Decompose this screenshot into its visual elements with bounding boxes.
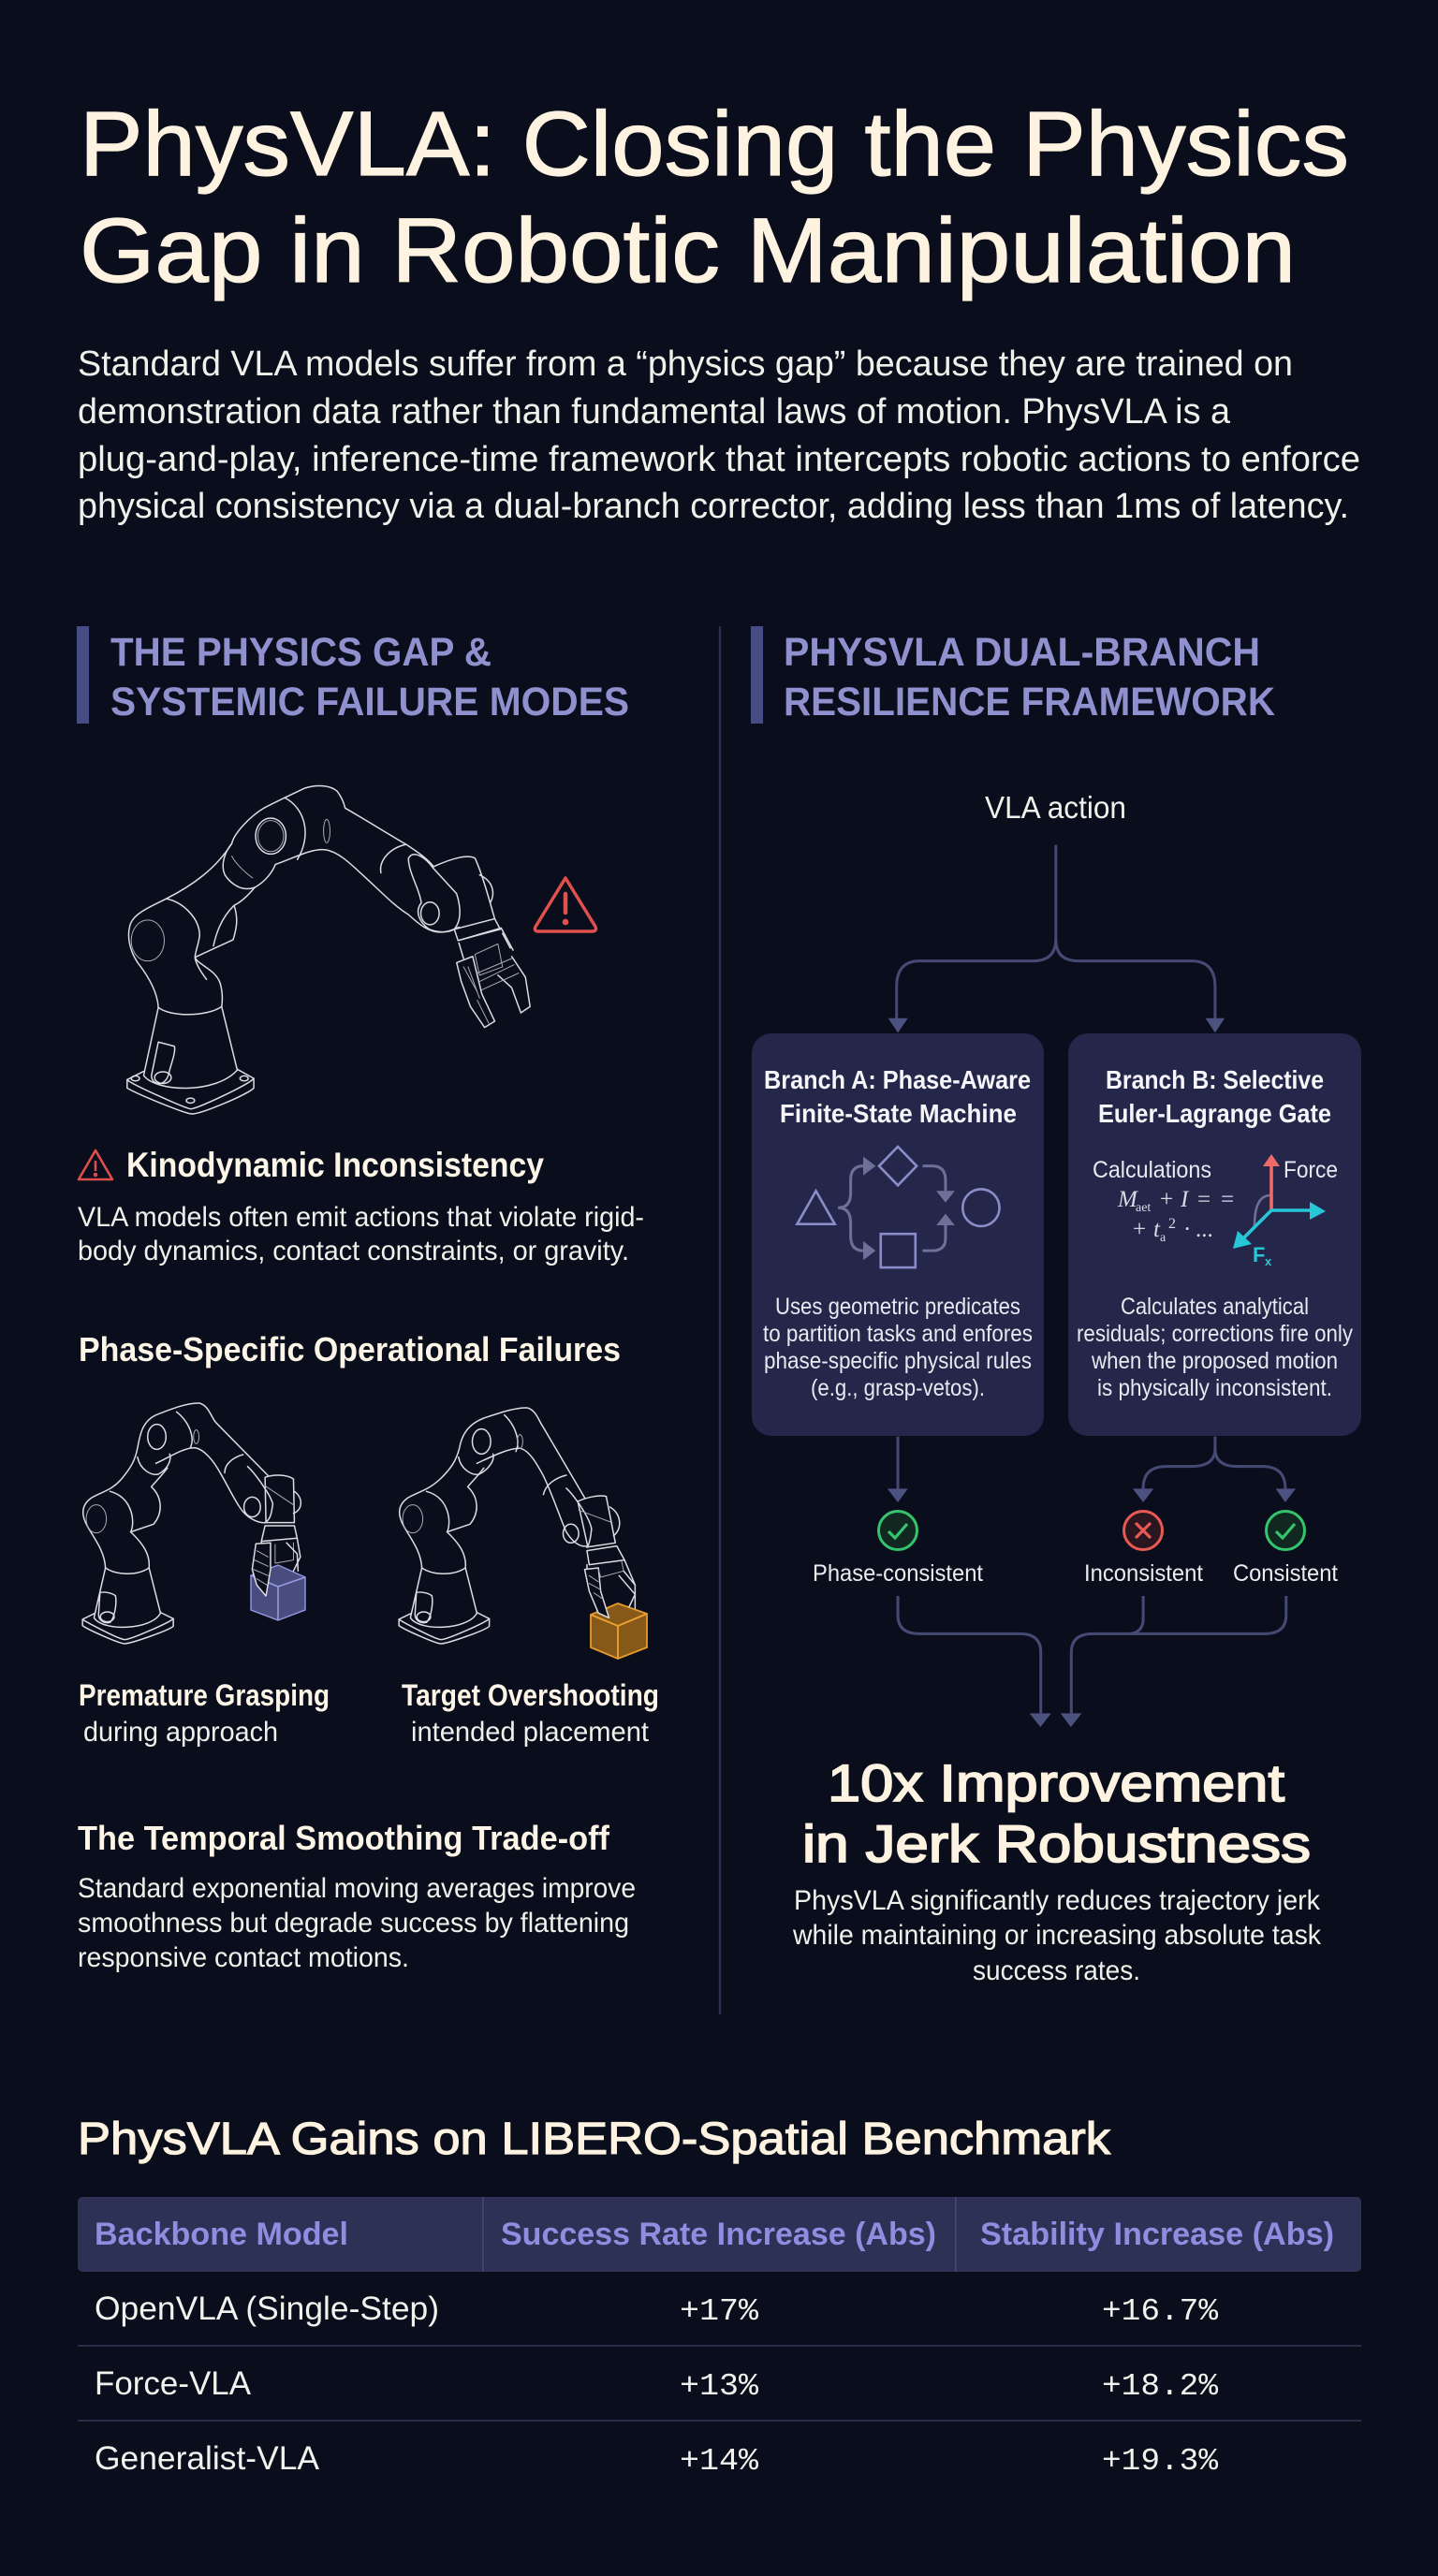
equations: calculations: = — [1221, 1187, 1234, 1212]
row: Force-VLA: +13% — [680, 2369, 758, 2404]
headline result — [802, 1753, 1311, 1873]
caption: target overshooting: intended placement — [411, 1717, 650, 1748]
block: kinodynamic inconsistency — [78, 1146, 644, 1266]
card: branch B: Branch B: Selective — [1106, 1065, 1324, 1094]
equations: calculations: = — [1197, 1187, 1211, 1212]
intro paragraph: plug-and-play, inference-time framework that intercepts robotic actions to enforce — [78, 440, 1360, 479]
icon: large red warning triangle — [535, 878, 595, 931]
table header row: Success Rate Increase (Abs) — [501, 2217, 936, 2252]
table header row — [78, 2197, 1361, 2272]
icon: force vectors — [1233, 1154, 1338, 1268]
equations: calculations: I — [1180, 1187, 1190, 1212]
table header row: Stability Increase (Abs) — [980, 2217, 1334, 2252]
block: kinodynamic inconsistency: body dynamics, contact constraints, or gravity. — [78, 1236, 629, 1266]
outcome: consistent: Consistent — [1233, 1560, 1338, 1587]
row: Generalist-VLA: +14% — [680, 2444, 758, 2479]
caption: premature grasping — [79, 1678, 330, 1748]
intro paragraph: demonstration data rather than fundamental laws of motion. PhysVLA is a — [78, 392, 1231, 432]
icon: force vectors: Force — [1284, 1157, 1338, 1183]
equations: calculations: + — [1133, 1217, 1146, 1242]
panel: dual-branch resilience framework — [751, 626, 1361, 1986]
icon: finite state machine diagram — [797, 1147, 1000, 1267]
table header row: Backbone Model — [95, 2217, 348, 2252]
equations: calculations: + — [1160, 1187, 1173, 1212]
illustration: premature grasping robot — [82, 1403, 301, 1644]
card: branch B: when the proposed motion — [1091, 1348, 1338, 1374]
intro paragraph: physical consistency via a dual-branch corrector, adding less than 1ms of latency. — [78, 487, 1349, 526]
row: Force-VLA — [95, 2365, 1218, 2404]
headline result: in Jerk Robustness — [802, 1814, 1311, 1873]
block: temporal smoothing trade-off: responsive contact motions. — [78, 1942, 409, 1973]
icon: small warning triangle — [79, 1150, 112, 1179]
card: branch A: Uses geometric predicates — [775, 1294, 1020, 1320]
arrows: branch outcomes — [888, 1437, 1296, 1502]
card: branch B — [1068, 1033, 1361, 1436]
title: Gap in Robotic Manipulation — [80, 199, 1296, 301]
card: branch B: residuals; corrections fire only — [1077, 1321, 1353, 1347]
equations: calculations — [1093, 1157, 1234, 1245]
outcome: phase-consistent: Phase-consistent — [813, 1560, 983, 1587]
result description: success rates. — [973, 1955, 1140, 1986]
equations: calculations: 2 — [1168, 1216, 1176, 1232]
illustration: robot arm overextended — [127, 785, 530, 1114]
row: Generalist-VLA — [95, 2440, 1218, 2479]
card: branch B: Euler-Lagrange Gate — [1098, 1099, 1331, 1128]
equations: calculations: M — [1117, 1187, 1138, 1212]
benchmark heading: PhysVLA Gains on LIBERO-Spatial Benchmark — [78, 2115, 1111, 2164]
right section heading: RESILIENCE FRAMEWORK — [784, 680, 1275, 724]
block: temporal smoothing trade-off: smoothness but degrade success by flattening — [78, 1908, 629, 1939]
equations: calculations: ... — [1196, 1217, 1213, 1242]
card: branch A: Branch A: Phase-Aware — [764, 1065, 1031, 1094]
intro paragraph: Standard VLA models suffer from a “physics gap” because they are trained on — [78, 344, 1293, 384]
caption: premature grasping: during approach — [83, 1717, 278, 1748]
result description: while maintaining or increasing absolute task — [792, 1920, 1322, 1951]
caption: premature grasping: Premature Grasping — [79, 1678, 330, 1712]
row: OpenVLA — [95, 2291, 1218, 2329]
table: benchmark results — [78, 2197, 1361, 2479]
label: VLA action: VLA action — [985, 790, 1126, 825]
result description — [792, 1885, 1322, 1986]
title — [80, 93, 1349, 301]
row: Force-VLA: Force-VLA — [95, 2365, 252, 2402]
headline result: 10x Improvement — [828, 1753, 1284, 1812]
left section heading — [77, 626, 629, 724]
panel: physics gap and failure modes — [77, 626, 659, 1973]
card: branch A — [752, 1033, 1044, 1436]
right section heading: PHYSVLA DUAL-BRANCH — [784, 630, 1260, 675]
intro paragraph — [78, 344, 1360, 526]
block: kinodynamic inconsistency: VLA models often emit actions that violate rigid- — [78, 1202, 644, 1233]
block: temporal smoothing trade-off: The Temporal Smoothing Trade-off — [78, 1819, 610, 1857]
illustration: target overshooting robot — [399, 1408, 635, 1644]
result description: PhysVLA significantly reduces trajectory jerk — [794, 1885, 1321, 1916]
equations: calculations: aet — [1136, 1201, 1151, 1215]
card: branch A: Finite-State Machine — [780, 1099, 1017, 1128]
icon: orange cube — [591, 1603, 647, 1659]
row: OpenVLA: +17% — [680, 2294, 758, 2329]
row: Generalist-VLA: Generalist-VLA — [95, 2440, 320, 2477]
card: branch A: to partition tasks and enfores — [763, 1321, 1033, 1347]
card: branch B: is physically inconsistent. — [1097, 1375, 1332, 1401]
block: temporal smoothing trade-off: Standard exponential moving averages improve — [78, 1873, 636, 1904]
block: kinodynamic inconsistency: Kinodynamic Inconsistency — [126, 1146, 544, 1184]
arrows: merge to result — [898, 1596, 1286, 1727]
equations: calculations: a — [1160, 1231, 1167, 1245]
icon: force vectors: x — [1265, 1254, 1272, 1268]
icon: force vectors: F — [1253, 1243, 1265, 1266]
right section heading — [751, 626, 1275, 724]
block: temporal smoothing trade-off — [78, 1819, 636, 1973]
card: branch B: Calculates analytical — [1121, 1294, 1309, 1320]
caption: target overshooting: Target Overshooting — [402, 1678, 659, 1712]
left section heading: SYSTEMIC FAILURE MODES — [110, 680, 629, 724]
card: branch A: (e.g., grasp-vetos). — [811, 1375, 985, 1401]
left section heading: THE PHYSICS GAP & — [110, 630, 492, 675]
outcome: phase-consistent — [813, 1511, 983, 1587]
icon: blue cube — [251, 1565, 305, 1620]
heading: phase-specific failures: Phase-Specific Operational Failures — [79, 1330, 621, 1368]
row: OpenVLA: +16.7% — [1102, 2294, 1218, 2329]
title: PhysVLA: Closing the Physics — [80, 93, 1349, 195]
row: Force-VLA: +18.2% — [1102, 2369, 1218, 2404]
caption: target overshooting — [402, 1678, 659, 1748]
row: Generalist-VLA: +19.3% — [1102, 2444, 1218, 2479]
equations: calculations: Calculations — [1093, 1157, 1211, 1183]
arrow: split to branches — [888, 845, 1225, 1032]
card: branch A: phase-specific physical rules — [764, 1348, 1032, 1374]
equations: calculations: · — [1183, 1217, 1191, 1242]
outcome: consistent — [1233, 1511, 1338, 1587]
row: OpenVLA: OpenVLA (Single-Step) — [95, 2291, 439, 2327]
equations: calculations: t — [1153, 1217, 1161, 1242]
outcome: inconsistent — [1084, 1511, 1203, 1587]
outcome: inconsistent: Inconsistent — [1084, 1560, 1203, 1587]
